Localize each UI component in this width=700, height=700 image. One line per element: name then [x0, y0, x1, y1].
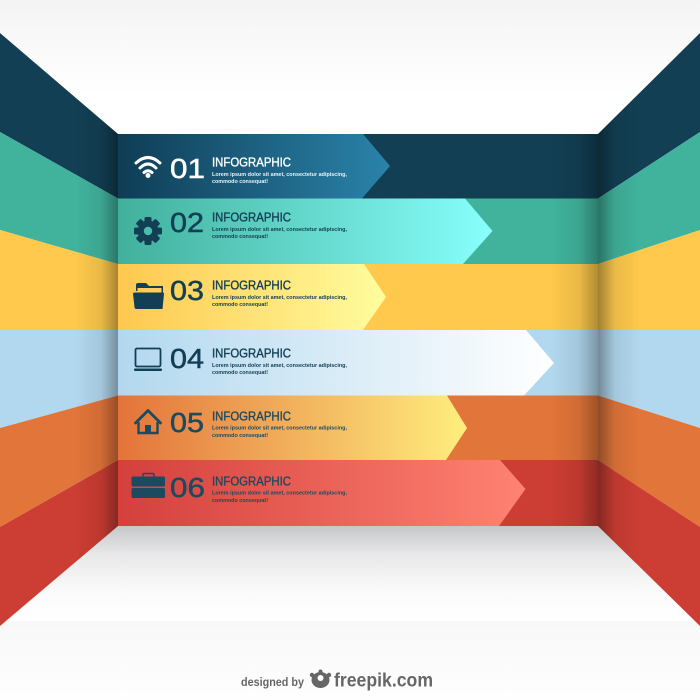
- number 01: 01: [170, 153, 205, 184]
- panel: row 01: [118, 134, 390, 198]
- body text 05: commodo consequat!: [212, 433, 268, 439]
- number 05: 05: [170, 407, 204, 438]
- heading 05: INFOGRAPHIC: [212, 410, 291, 424]
- icon: wifi: [136, 158, 160, 178]
- body text 05: Lorem ipsum dolor sit amet, consectetur adipiscing,: [212, 426, 347, 432]
- body text 03: commodo consequat!: [212, 302, 268, 308]
- arrow 01: [118, 134, 390, 198]
- body text 02: Lorem ipsum dolor sit amet, consectetur adipiscing,: [212, 227, 347, 233]
- icon: house: [136, 410, 160, 433]
- credit label: designed by: [241, 675, 304, 689]
- panel: row 03: [118, 264, 386, 330]
- body text 03: Lorem ipsum dolor sit amet, consectetur adipiscing,: [212, 295, 347, 301]
- body text 06: commodo consequat!: [212, 498, 268, 504]
- number 03: 03: [170, 275, 204, 306]
- panel: left wall: [0, 33, 118, 626]
- arrow 02: [118, 198, 492, 264]
- body text 04: commodo consequat!: [212, 370, 268, 376]
- panel: right wall: [598, 33, 700, 626]
- heading 04: INFOGRAPHIC: [212, 346, 291, 360]
- panel: row 05: [118, 396, 467, 460]
- panel: row 06: [118, 460, 526, 526]
- heading 06: INFOGRAPHIC: [212, 474, 291, 488]
- panel: row 02: [118, 198, 492, 264]
- number 02: 02: [170, 207, 204, 238]
- ceiling background: [0, 0, 700, 134]
- body text 06: Lorem ipsum dolor sit amet, consectetur adipiscing,: [212, 490, 347, 496]
- panel: back wall bands: [118, 134, 598, 526]
- icon: folder: [133, 283, 164, 309]
- floor background: [0, 526, 700, 621]
- icon: freepik logo: [310, 670, 331, 688]
- footer credit: [241, 670, 433, 692]
- panel: row 04: [118, 330, 554, 396]
- body text 01: Lorem ipsum dolor sit amet, consectetur adipiscing,: [212, 172, 347, 178]
- arrow 06: [118, 460, 526, 526]
- heading 01: INFOGRAPHIC: [212, 156, 291, 170]
- icon: gear: [134, 217, 162, 245]
- arrow 04: [118, 330, 554, 396]
- arrow 05: [118, 396, 467, 460]
- number 06: 06: [170, 472, 205, 503]
- lower page base: [0, 621, 700, 700]
- icon: laptop: [134, 348, 162, 371]
- heading 03: INFOGRAPHIC: [212, 278, 291, 292]
- arrow 03: [118, 264, 386, 330]
- heading 02: INFOGRAPHIC: [212, 210, 291, 224]
- number 04: 04: [170, 343, 204, 374]
- body text 02: commodo consequat!: [212, 234, 268, 240]
- body text 01: commodo consequat!: [212, 179, 268, 185]
- icon: briefcase: [132, 474, 165, 498]
- body text 04: Lorem ipsum dolor sit amet, consectetur adipiscing,: [212, 363, 347, 369]
- brand name: freepik.com: [334, 670, 433, 692]
